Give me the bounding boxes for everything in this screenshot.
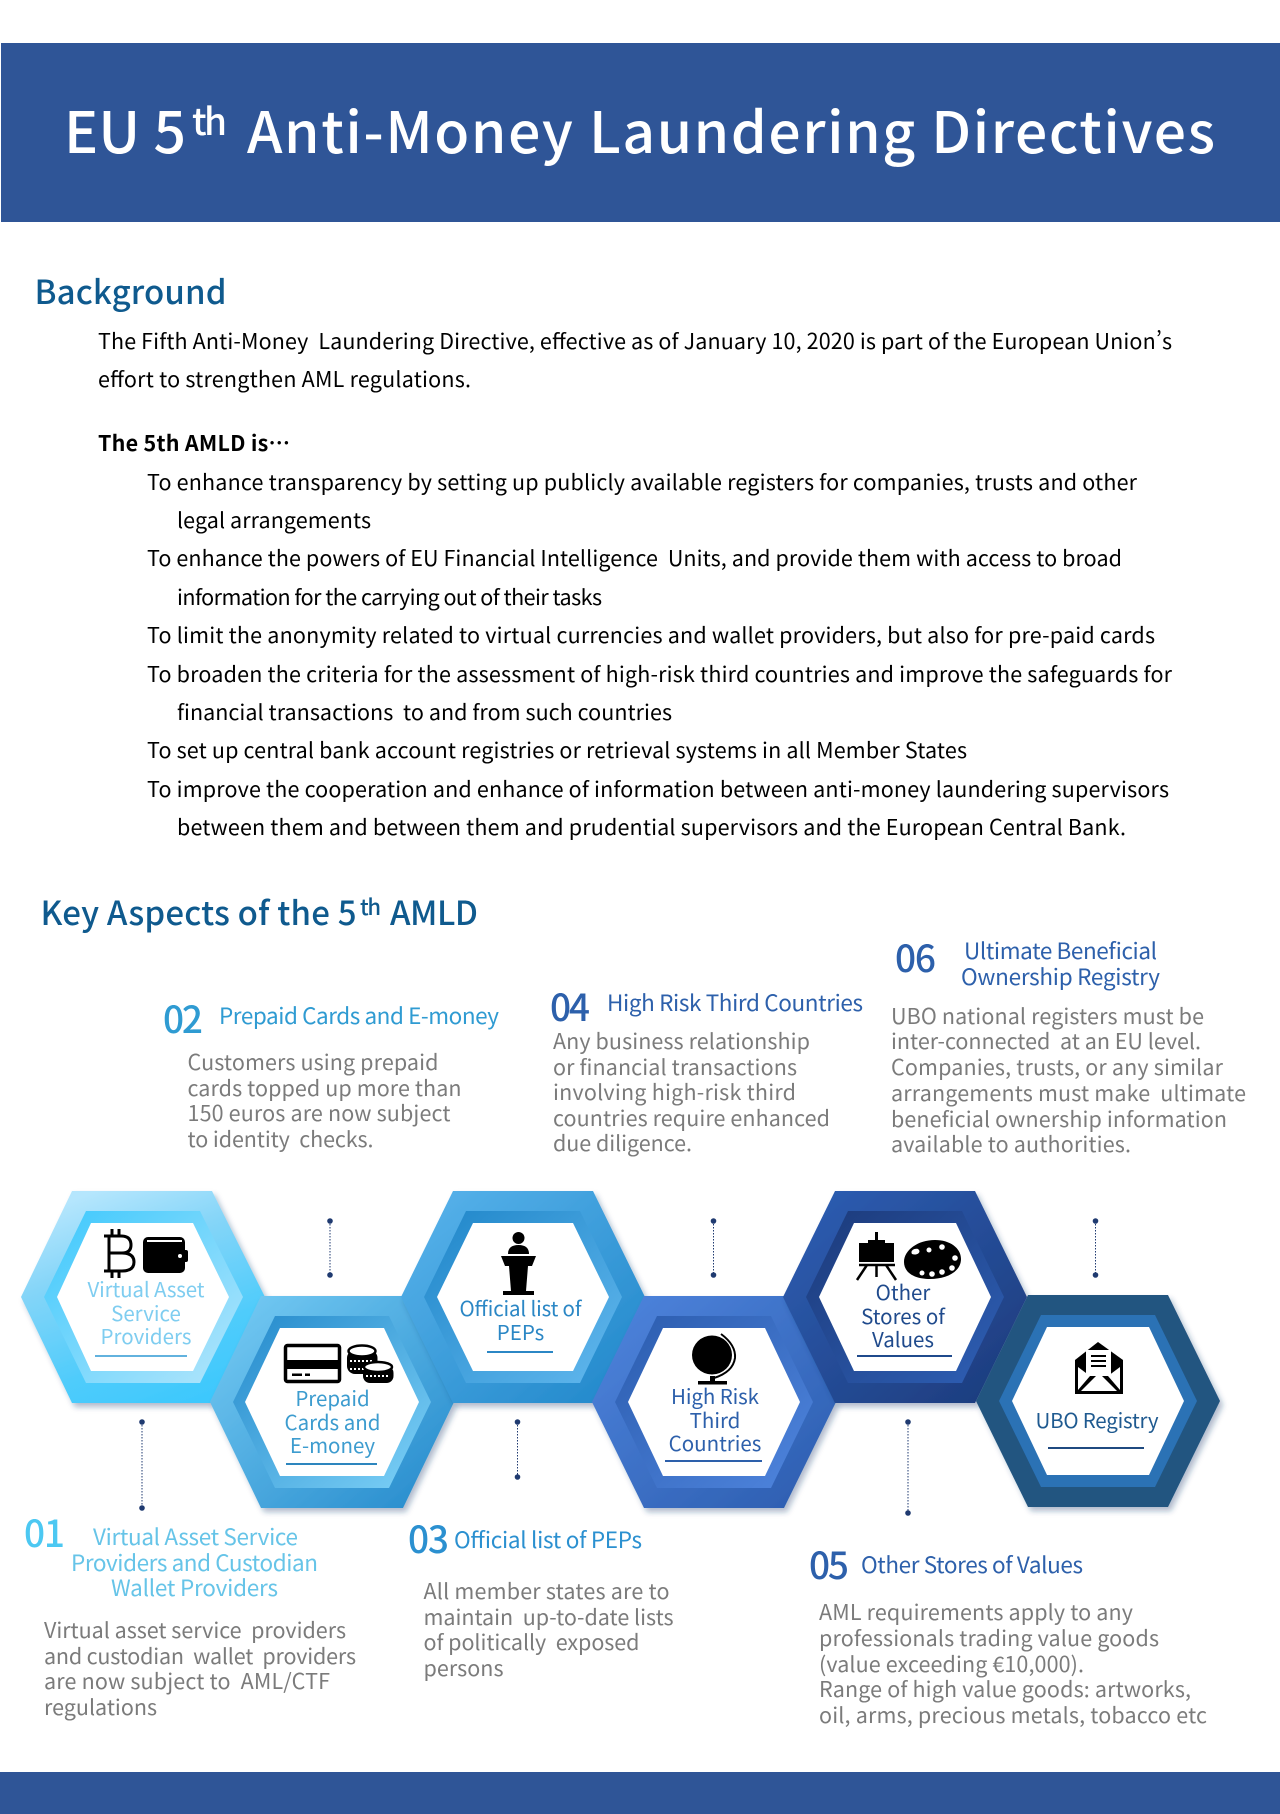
icon: easel <box>857 1232 896 1280</box>
bullet list of objectives: legal arrangements <box>177 504 371 535</box>
hexagon label: PEPs <box>497 1316 544 1346</box>
header banner <box>1 43 1280 222</box>
item 02: to identity checks. <box>188 1123 374 1154</box>
hexagon label: Stores of <box>861 1300 946 1330</box>
icon: envelope <box>1075 1342 1123 1394</box>
hexagon label <box>460 1292 583 1353</box>
hexagon label: Cards and <box>284 1406 381 1436</box>
hexagon label <box>1036 1404 1159 1449</box>
bullet list of objectives: To enhance transparency by setting up publicly available registers for companies, trusts and other <box>147 466 1138 497</box>
hexagon label: Prepaid <box>295 1382 370 1412</box>
item 06: UBO national registers must be <box>891 1000 1204 1031</box>
hexagon label <box>284 1382 381 1465</box>
intro paragraph <box>98 325 1172 394</box>
bullet list of objectives: To broaden the criteria for the assessment of high-risk third countries and improve the safeguards for <box>147 658 1173 689</box>
heading: Background: Background <box>34 266 226 314</box>
title: th <box>192 92 227 146</box>
hexagon label <box>88 1273 205 1357</box>
heading: Key Aspects: th <box>360 890 381 922</box>
item 03: All member states are to <box>424 1575 670 1606</box>
item 05: 05 <box>809 1536 849 1590</box>
hexagon: Official list of PEPs <box>401 1191 645 1403</box>
title: EU 5 <box>64 88 186 170</box>
hexagon label: Virtual Asset <box>88 1273 205 1303</box>
connector lines <box>139 1218 1098 1516</box>
item 02: 150 euros are now subject <box>188 1097 450 1128</box>
intro paragraph: effort to strengthen AML regulations. <box>98 363 471 394</box>
item 04: High Risk Third Countries <box>607 986 863 1018</box>
heading: Key Aspects: Key Aspects of the 5 <box>40 887 356 935</box>
item 05: Other Stores of Values <box>861 1548 1083 1580</box>
item 04: countries require enhanced <box>553 1102 830 1133</box>
intro paragraph: The Fifth Anti-Money Laundering Directive, effective as of January 10, 2020 is part of the European Union’s <box>98 325 1172 356</box>
item 02: Customers using prepaid <box>188 1046 438 1077</box>
hexagon label: Providers <box>101 1320 191 1350</box>
item 01: Wallet Providers <box>111 1571 278 1603</box>
hexagon label <box>857 1276 952 1357</box>
item 01: and custodian wallet providers <box>44 1640 356 1671</box>
item 05: Range of high value goods: artworks, <box>819 1673 1191 1704</box>
item 05: oil, arms, precious metals, tobacco etc <box>819 1699 1207 1730</box>
bullet list of objectives: To set up central bank account registries or retrieval systems in all Member States <box>147 734 967 765</box>
item 04: due diligence. <box>553 1127 692 1158</box>
hexagon label: E-money <box>290 1429 375 1459</box>
hexagon label: Service <box>111 1297 181 1327</box>
item 04: or financial transactions <box>553 1051 797 1082</box>
item 05: professionals trading value goods <box>819 1622 1159 1653</box>
hexagon label: High Risk <box>671 1380 760 1410</box>
item 03: persons <box>424 1652 504 1683</box>
item 02 <box>163 990 499 1154</box>
hexagon: UBO Registry <box>976 1295 1220 1507</box>
bullet list of objectives: To improve the cooperation and enhance of information between anti-money laundering supervisors <box>147 773 1169 804</box>
icon: podium <box>501 1232 536 1295</box>
item 06: Ultimate Beneficial <box>964 934 1157 966</box>
item 01: Virtual Asset Service <box>93 1520 298 1552</box>
bullet list of objectives: information for the carrying out of their tasks <box>177 581 602 612</box>
item 06: inter-connected at an EU level. <box>891 1025 1201 1056</box>
icon: palette <box>904 1240 961 1279</box>
item 01 <box>24 1504 356 1722</box>
hexagon label: Countries <box>669 1427 761 1457</box>
bullet list of objectives <box>147 466 1173 842</box>
item 04: involving high-risk third <box>553 1076 796 1107</box>
item 06: arrangements must make ultimate <box>891 1077 1246 1108</box>
item 03 <box>408 1510 674 1683</box>
hexagon label: Third <box>690 1404 740 1434</box>
hexagon label <box>665 1380 762 1462</box>
hexagon: Prepaid Cards and E-money <box>210 1296 454 1508</box>
item 06: beneficial ownership information <box>891 1103 1227 1134</box>
footer banner <box>0 1772 1280 1814</box>
item 02: Prepaid Cards and E-money <box>219 999 499 1031</box>
item 04 <box>550 978 863 1158</box>
icon: bitcoin <box>104 1229 134 1278</box>
hexagon label: UBO Registry <box>1036 1404 1159 1434</box>
heading: Key Aspects: AMLD <box>390 887 478 935</box>
item 01: regulations <box>44 1691 157 1722</box>
icon: globe <box>692 1334 735 1384</box>
subheading: The 5th AMLD is: The 5th AMLD is… <box>98 427 290 458</box>
title: Anti-Money Laundering Directives <box>247 88 1215 170</box>
item 05: AML requirements apply to any <box>819 1596 1133 1627</box>
item 03: of politically exposed <box>424 1626 640 1657</box>
item 04: Any business relationship <box>553 1025 810 1056</box>
item 06: 06 <box>895 929 936 983</box>
bullet list of objectives: financial transactions to and from such countries <box>177 696 672 727</box>
item 03: Official list of PEPs <box>454 1523 642 1555</box>
bullet list of objectives: To limit the anonymity related to virtual currencies and wallet providers, but also for pre-paid cards <box>147 619 1155 650</box>
bullet list of objectives: between them and between them and prudential supervisors and the European Central Bank. <box>177 811 1126 842</box>
item 06: Companies, trusts, or any similar <box>891 1051 1224 1082</box>
item 06 <box>891 929 1246 1159</box>
item 03: 03 <box>408 1510 449 1564</box>
item 02: 02 <box>163 990 203 1044</box>
item 02: cards topped up more than <box>188 1072 462 1103</box>
item 01: 01 <box>24 1504 65 1558</box>
icon: wallet <box>143 1237 188 1273</box>
bullet list of objectives: To enhance the powers of EU Financial Intelligence Units, and provide them with access to broad <box>147 542 1122 573</box>
hexagon label: Other <box>876 1276 930 1306</box>
hexagon: Other Stores of Values <box>783 1191 1027 1403</box>
icon: coins <box>347 1346 394 1383</box>
hexagon label: Official list of <box>460 1292 583 1322</box>
item 05: (value exceeding €10,000). <box>819 1648 1084 1679</box>
hexagon label: Values <box>872 1323 934 1353</box>
item 05 <box>809 1536 1207 1730</box>
item 01: Virtual asset service providers <box>44 1614 346 1645</box>
item 06: Ownership Registry <box>961 960 1160 992</box>
item 03: maintain up-to-date lists <box>424 1601 674 1632</box>
item 01: are now subject to AML/CTF <box>44 1665 330 1696</box>
icon: card <box>286 1346 340 1382</box>
hexagon: Virtual Asset Service Providers <box>21 1191 265 1403</box>
item 04: 04 <box>550 978 590 1032</box>
item 01: Providers and Custodian <box>71 1546 318 1578</box>
hexagon: High Risk Third Countries <box>592 1296 836 1508</box>
item 06: available to authorities. <box>891 1128 1131 1159</box>
